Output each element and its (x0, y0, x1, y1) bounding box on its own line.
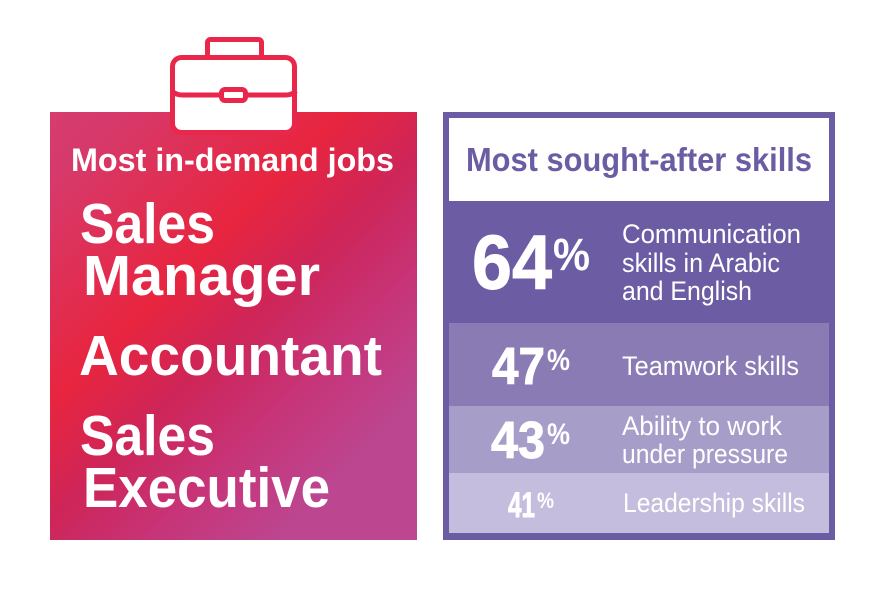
heading box (449, 118, 829, 201)
heading: most in-demand jobs: Most in-demand jobs (71, 142, 394, 178)
stat: 41%: % (537, 488, 554, 513)
label: teamwork skills: Teamwork skills (622, 351, 799, 381)
label: ability to work under pressure: under pressure (622, 439, 788, 469)
row: teamwork skills 47% (449, 323, 829, 406)
heading: most sought-after skills: Most sought-after skills (466, 141, 812, 178)
row: leadership skills 41% (449, 473, 829, 533)
label: communication skills in Arabic and English: and English (622, 276, 752, 306)
stat: 47%: % (547, 344, 570, 377)
label: communication skills in Arabic and English: skills in Arabic (622, 248, 780, 278)
panel: most in-demand jobs (50, 112, 417, 540)
row: ability to work under pressure 43% (449, 406, 829, 473)
stat: 47%: 47 (492, 338, 545, 396)
panel: most sought-after skills (443, 112, 835, 540)
job: accountant: Accountant (79, 324, 382, 388)
job: sales executive: Sales (80, 404, 215, 468)
job: sales executive (80, 404, 330, 520)
stat: 43%: % (547, 418, 570, 451)
label: ability to work under pressure: Ability to work (622, 411, 782, 441)
label: leadership skills: Leadership skills (623, 488, 805, 518)
label: ability to work under pressure (622, 411, 788, 469)
job: sales manager (80, 192, 320, 308)
stat: 43%: 43 (491, 412, 545, 470)
row: communication skills 64% (449, 201, 829, 323)
job: sales executive: Executive (83, 456, 330, 520)
label: communication skills in Arabic and English: Communication (622, 219, 801, 249)
label: communication skills in Arabic and English (622, 219, 801, 306)
stat: 64%: 64 (472, 220, 552, 306)
icon: briefcase (172, 40, 296, 132)
job: sales manager: Manager (83, 244, 320, 308)
job: sales manager: Sales (80, 192, 215, 256)
stat: 41%: 41 (508, 486, 535, 525)
stat: 64%: % (553, 229, 590, 280)
